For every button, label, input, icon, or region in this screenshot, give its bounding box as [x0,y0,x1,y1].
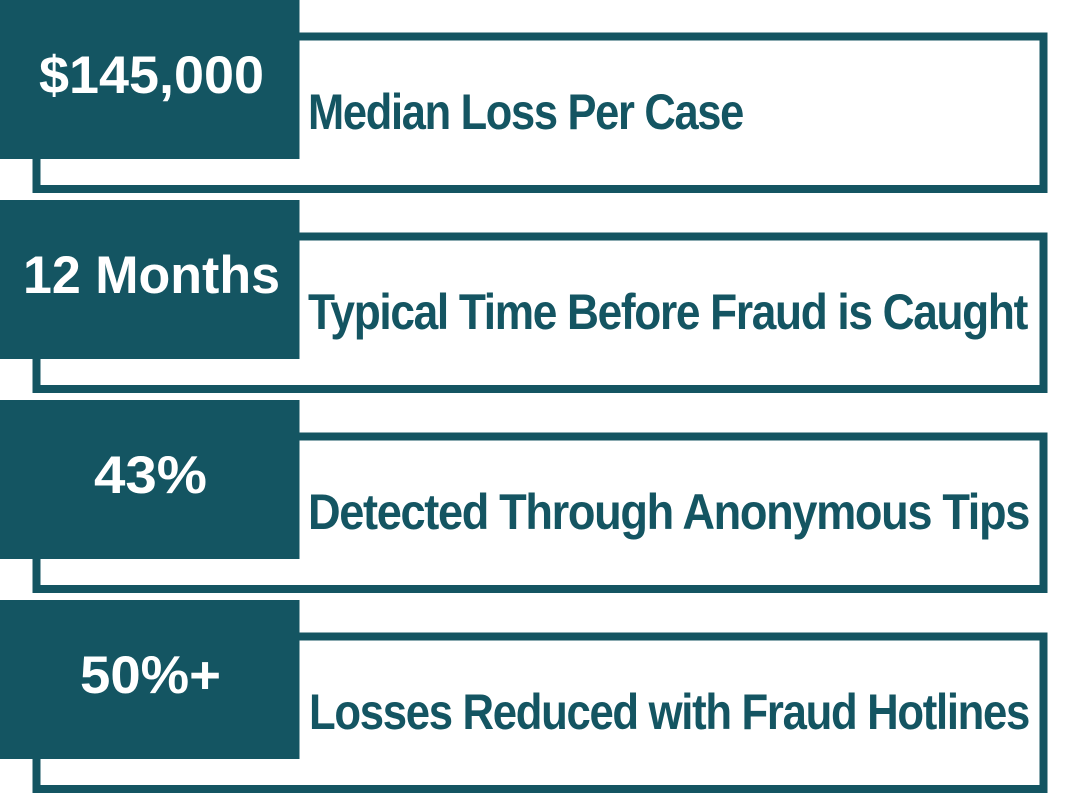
value tag [0,600,300,759]
outline box [36,36,1044,189]
stat row: median loss [0,0,1044,189]
value tag [0,400,300,559]
label: median loss per case: Median Loss Per Case [308,84,744,140]
value tag [0,0,300,159]
outline box [36,436,1044,589]
stat row: tips [0,400,1044,589]
value: $145,000: $145,000 [39,46,264,105]
value: 50%+: 50%+ [80,646,221,705]
stat row: time to catch [0,200,1044,389]
value: 12 months: 12 Months [23,246,280,305]
stat row: hotlines [0,600,1044,789]
outline box [36,236,1044,389]
value: 43%: 43% [94,446,207,505]
outline box [36,636,1044,789]
value tag [0,200,300,359]
